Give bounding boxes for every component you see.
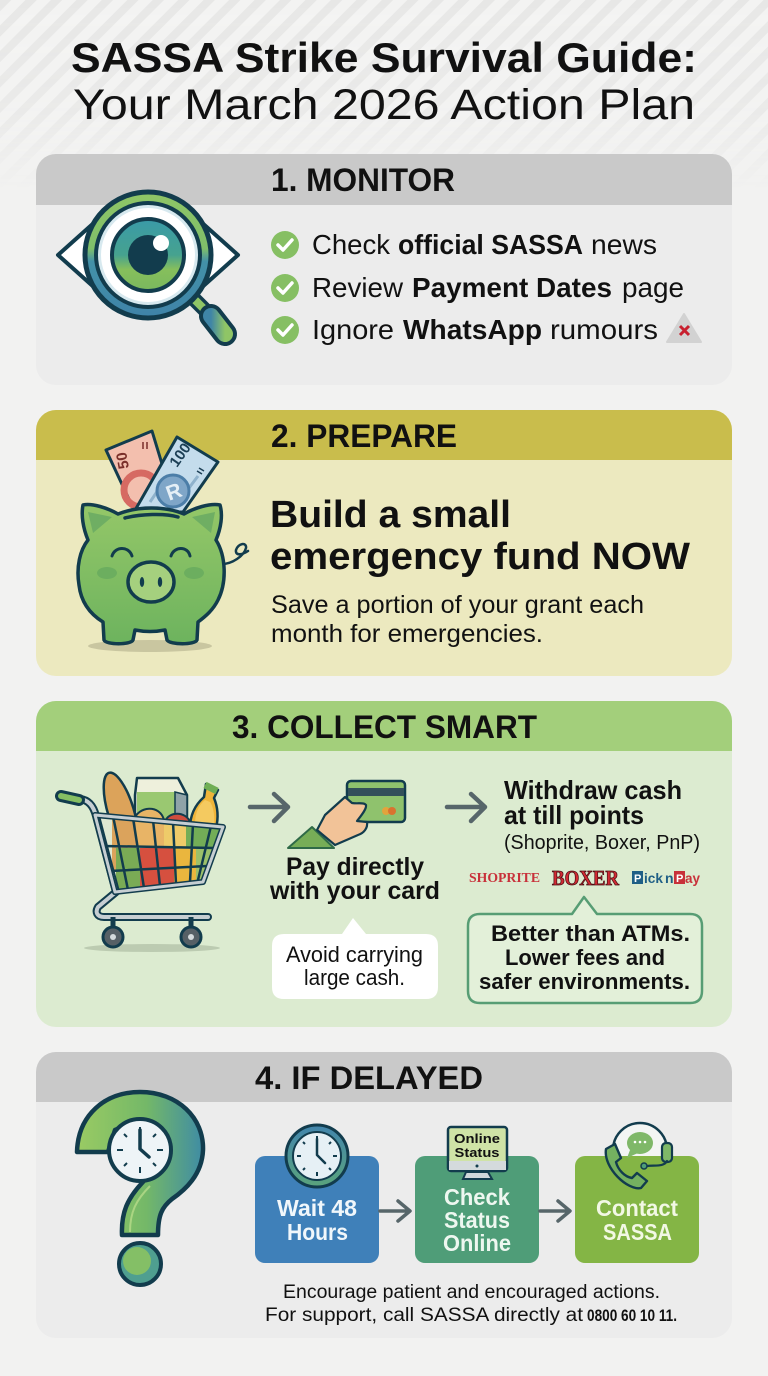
text: withdraw cash: at till points [504,800,644,830]
banknote: 100: R [163,479,185,506]
callout: avoid carrying cash [272,918,438,999]
callout: avoid carrying cash: Avoid carrying [286,942,423,967]
list item: official news: news [591,229,657,260]
title [71,34,697,129]
step: check status online: Online [443,1230,511,1256]
banknote: 100 [134,437,218,512]
text: withdraw cash: Withdraw cash [504,775,682,805]
header: 3. collect smart: 3. COLLECT SMART [232,709,537,745]
panel: 3. collect smart [36,701,732,1027]
arrow: check to contact [540,1201,570,1221]
step: contact sassa: Contact [596,1195,678,1221]
step: wait 48 hours: Wait 48 [277,1195,357,1221]
list item: whatsapp rumours: Ignore [312,314,394,345]
banknote: 100: 100 [166,440,195,470]
arrow: card to till points [447,794,485,821]
header: 4. if delayed: 4. IF DELAYED [255,1060,483,1096]
header: 4. if delayed [36,1052,732,1102]
heading: emergency fund: Build a small [270,494,511,536]
icon: shopping cart with groceries [61,769,230,952]
label: pay directly: Pay directly [286,853,424,881]
checklist [271,229,701,345]
wheels [113,917,191,935]
footer note: Encourage patient and encouraged actions. [283,1282,660,1303]
logo: pick n pay: n [665,870,674,886]
title: Your March 2026 Action Plan [73,81,695,129]
body text: save a portion: Save a portion of your grant each [271,591,644,619]
list item: official news: Check [312,229,391,260]
cart frame [80,799,208,917]
callout: avoid carrying cash: large cash. [304,965,405,990]
icon: piggy bank with banknotes [78,431,248,652]
logo: pick n pay: P [634,873,641,885]
list item: payment dates: Payment Dates [412,272,612,303]
banknote: 50 [106,431,176,510]
icon: clock [286,1125,348,1187]
step: contact sassa [575,1123,699,1263]
icon: warning triangle with x [667,314,701,342]
header: 2. prepare [36,410,732,460]
logo: pick n pay: P [676,873,683,885]
banknote: 50: 50 [113,451,133,470]
list item: official news: official SASSA [398,229,583,260]
panel: 1. monitor [36,154,732,385]
body text: save a portion: month for emergencies. [271,620,543,648]
handle [61,796,79,800]
header: 1. monitor: 1. MONITOR [271,162,455,198]
list item: official news [271,229,657,260]
list item: whatsapp rumours [271,314,658,345]
logo: shoprite: SHOPRITE [469,871,540,886]
arrow: cart to card [250,794,288,821]
step: check status online [415,1127,539,1263]
step: check status online: Check [444,1184,510,1210]
header: 3. collect smart [36,701,732,751]
icon: monitor showing online status: Online [454,1131,500,1146]
heading: emergency fund [270,494,690,578]
groceries [135,778,187,825]
step: check status online: Status [444,1207,510,1233]
icon: monitor showing online status: Status [454,1145,500,1160]
logo: pick n pay: ick [644,870,663,886]
list item: payment dates [271,272,684,303]
icon: question mark with clock [77,1092,203,1285]
text: withdraw cash [504,775,700,854]
callout: better than ATMs: Better than ATMs. [491,921,690,946]
step: wait 48 hours [255,1125,379,1263]
title: SASSA Strike Survival Guide: [71,34,697,81]
list item: payment dates: Review [312,272,404,303]
callout: better than ATMs: safer environments. [479,969,690,994]
list item: whatsapp rumours: rumours [550,314,658,345]
panel: 2. prepare [36,410,732,676]
footer note [265,1282,677,1326]
step: contact sassa: SASSA [603,1219,672,1245]
step: wait 48 hours: Hours [287,1219,348,1245]
background [0,0,768,87]
header: 1. monitor [36,154,732,205]
arrow: wait to check [380,1201,410,1221]
piggy body [88,640,212,652]
body text: save a portion [271,591,644,648]
list item: payment dates: page [622,272,684,303]
footer note: 0800 60 10 11. [587,1306,677,1325]
header: 2. prepare: 2. PREPARE [271,418,457,454]
basket contents [108,819,220,888]
footer note: For support, call SASSA directly at [265,1305,584,1326]
chat bubble [627,1132,653,1158]
label: pay directly [269,853,440,905]
callout: better than ATMs [468,897,702,1003]
retailer logos [469,866,700,890]
label: pay directly: with your card [269,877,440,905]
icon: phone with headset and chat bubble [606,1123,672,1188]
logo: pick n pay: ay [685,870,700,886]
logo: pick n pay [632,870,700,886]
list item: whatsapp rumours: WhatsApp [403,314,542,345]
heading: emergency fund: emergency fund NOW [270,536,690,578]
logo: boxer: BOXER [552,866,620,890]
panel: 4. if delayed [36,1052,732,1338]
callout: better than ATMs: Lower fees and [505,945,665,970]
icon: monitor showing online status [448,1127,507,1179]
face [112,548,190,556]
text: withdraw cash: (Shoprite, Boxer, PnP) [504,832,700,854]
icon: eye under magnifying glass [58,192,238,334]
icon: hand holding bank card [288,781,405,848]
